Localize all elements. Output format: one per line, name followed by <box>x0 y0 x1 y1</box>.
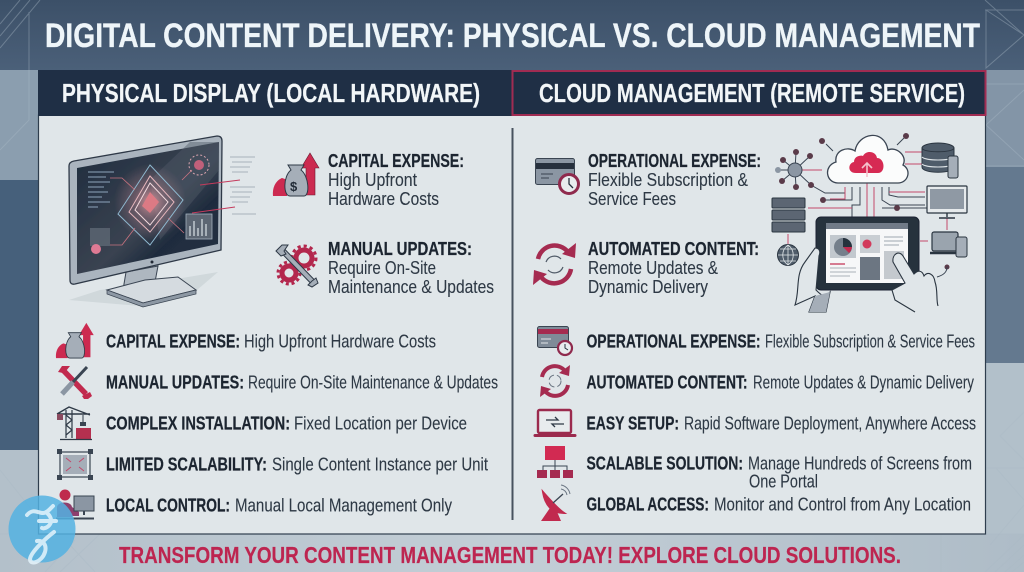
icon: wrench and screwdriver <box>58 366 92 399</box>
text: capital expense callout <box>328 150 464 209</box>
text: capital expense callout: Hardware Costs <box>328 188 439 209</box>
text: manual updates callout: Require On-Site <box>328 257 436 278</box>
row: easy setup <box>535 410 976 436</box>
icon: org chart <box>537 446 573 478</box>
row: manual updates <box>58 366 498 399</box>
text: automated content callout: AUTOMATED CONTENT: <box>588 238 759 259</box>
illustration: cloud network and tablet <box>772 133 967 312</box>
text: automated content callout <box>588 238 759 297</box>
watermark logo <box>8 496 76 563</box>
row: global access <box>541 485 971 521</box>
panel: comparison body <box>38 115 986 534</box>
icon: card and clock small <box>538 326 572 355</box>
row: local control: Manual Local Management Only <box>235 494 453 516</box>
center divider <box>512 128 514 520</box>
illustration: desktop monitor <box>69 136 256 307</box>
row: scalable solution: One Portal <box>749 470 818 492</box>
icon: money bag small <box>56 323 94 358</box>
row: complex installation: Fixed Location per Device <box>294 412 467 434</box>
row: complex installation <box>57 407 467 440</box>
text: manual updates callout: MANUAL UPDATES: <box>328 238 472 259</box>
text: operational expense callout: Service Fees <box>588 188 676 209</box>
icon: money bag with arrow: $ <box>290 179 298 194</box>
icon: sync small <box>540 365 570 397</box>
row: scalable solution <box>537 446 972 492</box>
heading: physical display: PHYSICAL DISPLAY (LOCAL HARDWARE) <box>62 78 480 108</box>
text: operational expense callout <box>588 150 761 209</box>
row: local control <box>56 490 453 518</box>
icon: sync arrows <box>533 243 576 285</box>
heading: cloud management <box>512 71 986 115</box>
row: global access: Monitor and Control from Any Location <box>714 494 971 514</box>
row: local control: LOCAL CONTROL: <box>106 494 230 516</box>
row: capital expense: CAPITAL EXPENSE: <box>106 330 240 352</box>
row: capital expense <box>56 323 436 358</box>
row: easy setup: EASY SETUP: <box>586 412 679 434</box>
row: operational expense: OPERATIONAL EXPENSE: <box>586 330 760 352</box>
text: capital expense callout: CAPITAL EXPENSE: <box>328 150 464 171</box>
row: scalable solution: SCALABLE SOLUTION: <box>586 452 743 474</box>
icon: gears and wrench <box>276 245 318 287</box>
row: operational expense <box>538 326 975 355</box>
icon: laptop <box>535 410 575 436</box>
icon: person at computer <box>56 490 94 518</box>
text: operational expense callout: Flexible Subscription & <box>588 169 749 190</box>
heading: physical display <box>38 70 512 116</box>
row: capital expense: High Upfront Hardware Costs <box>244 330 436 352</box>
row: limited scalability: LIMITED SCALABILITY: <box>106 454 267 474</box>
row: global access: GLOBAL ACCESS: <box>586 494 709 514</box>
row: automated content: AUTOMATED CONTENT: <box>586 372 748 392</box>
icon: fixed frame <box>57 449 93 480</box>
text: automated content callout: Remote Updates & <box>588 257 719 278</box>
text: manual updates callout: Maintenance & Updates <box>328 276 494 297</box>
row: limited scalability <box>57 449 488 480</box>
text: automated content callout: Dynamic Delivery <box>588 276 709 297</box>
text: capital expense callout: High Upfront <box>328 169 417 190</box>
row: manual updates: Require On-Site Maintenance & Updates <box>248 372 498 392</box>
text: operational expense callout: OPERATIONAL EXPENSE: <box>588 150 761 171</box>
row: manual updates: MANUAL UPDATES: <box>106 372 244 392</box>
icon: credit card with clock <box>536 158 578 194</box>
row: complex installation: COMPLEX INSTALLATION: <box>106 412 290 434</box>
icon: money bag with arrow <box>273 153 319 196</box>
icon: crane <box>57 407 92 440</box>
icon: satellite dish <box>541 485 570 521</box>
row: automated content <box>540 365 975 397</box>
row: limited scalability: Single Content Instance per Unit <box>272 454 488 474</box>
text: manual updates callout <box>328 238 494 297</box>
